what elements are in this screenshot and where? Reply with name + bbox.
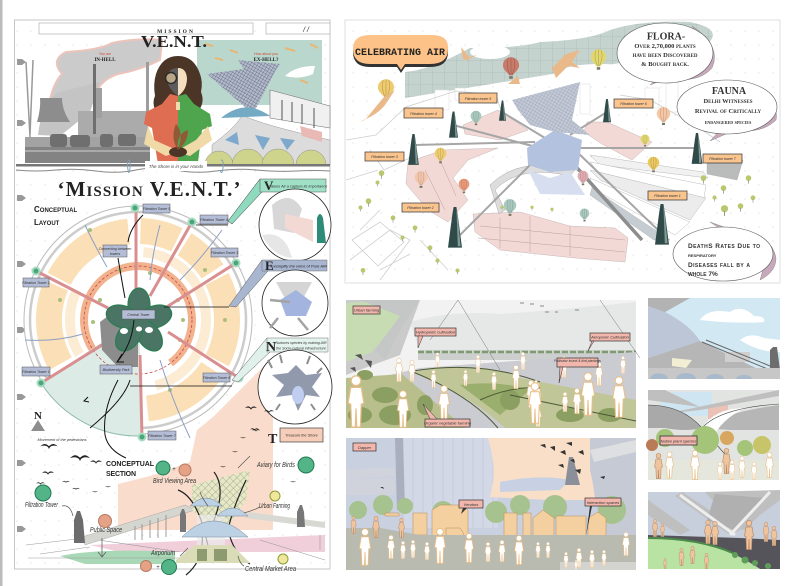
- hero: ex-hell green scene: [197, 40, 330, 165]
- bird flock: [36, 406, 296, 493]
- bubble: death rates: whole 7%: [688, 271, 718, 278]
- section labels: Aviary for Birds: [256, 462, 295, 469]
- tower shaft: [395, 438, 405, 510]
- labels: Interaction spaces: [587, 500, 619, 505]
- bubble: death rates: respiratory: [688, 253, 717, 259]
- section labels: [25, 462, 296, 573]
- diagonal decks: [415, 112, 697, 235]
- bubble: fauna: endangered species: [705, 120, 752, 126]
- labels: Dapper: [358, 445, 372, 450]
- tower labels: Filtration tower 1: [654, 194, 681, 198]
- deck and skyline: [648, 341, 760, 370]
- bubble: celebrating air: CELEBRATING AIR: [355, 47, 446, 59]
- tower labels on plan: Connecting between: [99, 247, 131, 251]
- hero: in-hell polluted scene: [25, 39, 162, 165]
- plaza lines: [425, 160, 625, 256]
- tower labels on plan: [22, 204, 238, 440]
- market area: [176, 545, 250, 563]
- callout: N: N: [266, 340, 276, 355]
- dome: [648, 298, 700, 358]
- mission small title: MISSION: [157, 29, 195, 35]
- hedge: [732, 552, 771, 569]
- hedge band: [418, 350, 636, 360]
- green ground patch: [60, 551, 175, 564]
- peach building rings: [14, 196, 262, 444]
- pink plazas: [406, 110, 652, 262]
- glass facade: [403, 438, 498, 528]
- labels: [353, 443, 621, 536]
- callout: V: Values Air a capture its importance: [269, 184, 327, 188]
- caption: in-hell: You are: [99, 52, 111, 56]
- tower labels: Filtration tower 7: [709, 157, 737, 161]
- tower labels on plan: towers: [110, 252, 120, 256]
- left panels: [346, 467, 395, 495]
- white fan canopies: [590, 155, 743, 240]
- ground lines: [26, 535, 325, 560]
- caption: movement of pedestrians: Movement of the pedestrians: [38, 438, 87, 442]
- labels: [353, 306, 630, 427]
- tower labels on plan: Filtration Tower 7: [148, 434, 177, 438]
- section labels: Urban Farming: [259, 503, 290, 510]
- callout: E: E: [265, 258, 274, 273]
- caption: ex-hell: How about you: [254, 52, 278, 56]
- north arrow: [31, 410, 45, 431]
- labels: Pollinator insect & bird plantings: [554, 359, 601, 363]
- header date marks: / /: [302, 27, 310, 34]
- tower labels on plan: Filtration Tower 6: [203, 376, 230, 380]
- tower labels: Filtration tower 2: [407, 206, 434, 210]
- circular promenade: [64, 246, 212, 394]
- birds over market: [380, 442, 605, 489]
- central star tower: [103, 288, 175, 356]
- kiosks: [385, 505, 606, 552]
- promenade deck: [82, 505, 195, 545]
- labels: Organic vegetable farming: [424, 420, 472, 426]
- illustration: girl with gas mask holding plant: [144, 56, 212, 164]
- badges: filtration and people icons: +: [156, 565, 160, 571]
- conceptual section drawing: [26, 456, 325, 575]
- left filtration tower: [74, 511, 85, 543]
- trees: [646, 426, 771, 456]
- sky peach: [488, 438, 600, 500]
- ground pink: [90, 535, 325, 552]
- tower at right: [770, 347, 780, 370]
- panel: urban farming perspective: [346, 300, 640, 428]
- section labels: Airporium: [150, 550, 175, 557]
- caption: in-hell: IN-HELL: [94, 58, 116, 63]
- conceptual section heading: CONCEPTUAL: [106, 461, 155, 468]
- tower labels on plan: Filtration Tower 2: [22, 281, 50, 285]
- distant tower: [565, 457, 580, 485]
- tower labels: Filtration tower 3: [371, 155, 398, 159]
- tower labels: [365, 93, 742, 212]
- detail circle: filtration tower: [259, 189, 331, 261]
- panel: green lawn walkway: [648, 490, 780, 569]
- central tower shadow: [100, 307, 138, 367]
- torn paper strip with caption: [16, 160, 330, 173]
- badges: filtration and people icons: [35, 457, 314, 574]
- section labels: Filtration Tower: [25, 502, 58, 509]
- bubble: fauna: Revival of Critically: [695, 108, 762, 115]
- left gray structure with green roof: [346, 300, 420, 375]
- callout: T: [268, 428, 323, 447]
- label: Native plant species: [661, 438, 696, 444]
- callout: V: [196, 178, 331, 261]
- bubble: death rates: [673, 222, 776, 281]
- callout: T: T: [268, 432, 278, 447]
- dark path: [648, 535, 780, 569]
- conceptual section heading: [106, 461, 155, 478]
- stepped central ring: [490, 165, 575, 214]
- workers: [348, 352, 626, 427]
- tower labels on plan: Central Tower: [127, 313, 150, 317]
- bubble: fauna: Delhi Witnesses: [703, 98, 753, 105]
- arrows: [62, 456, 260, 566]
- spokes: [36, 208, 239, 437]
- detail circle: lattice core: [262, 270, 328, 336]
- bubble: death rates: DeathS Rates Due to: [688, 243, 760, 250]
- tower labels: Filtration tower 6: [620, 102, 647, 106]
- bubble: death rates: Diseases fall by a: [688, 262, 750, 269]
- tower labels: Filtration tower 4: [410, 112, 437, 116]
- blue circulation arcs: [25, 225, 222, 438]
- aviary lattice: [192, 470, 250, 535]
- hot air balloons: [378, 49, 670, 221]
- callout: N: the Socio-cultural infrastructure: [276, 346, 326, 350]
- bubble: flora: [617, 23, 714, 85]
- heading: mission vent: ‘MISSION V.E.N.T.’: [58, 177, 240, 201]
- conceptual layout plan: [14, 196, 262, 458]
- callout: N: Nurtures species by making AIR: [275, 341, 327, 345]
- bubble: flora: & Bought back.: [641, 61, 689, 68]
- ground: [346, 528, 636, 570]
- conceptual section heading: SECTION: [106, 471, 136, 478]
- city outline: [346, 91, 740, 280]
- mint sector: [41, 320, 142, 436]
- section labels: Bird Viewing Area: [153, 478, 196, 485]
- panel: central market perspective: [346, 438, 636, 570]
- binder hole arrows: [17, 59, 26, 532]
- detail circle: star plan: [258, 350, 332, 424]
- structure lines: [430, 300, 640, 370]
- caption: in-hell: [94, 52, 116, 63]
- subheading: conceptual layout: [34, 205, 77, 227]
- callout: T: Treasure the Shore: [285, 434, 318, 438]
- crowd: [351, 516, 630, 570]
- labels: Hydroponic cultivation: [416, 330, 456, 334]
- bubble: fauna: [677, 80, 777, 141]
- walkway: [346, 352, 636, 428]
- roof arches: [648, 390, 779, 414]
- callout: V: V: [264, 178, 274, 193]
- tower labels on plan: Filtration Tower 5: [143, 207, 170, 211]
- bubble: flora: have been Discovered: [632, 52, 698, 59]
- tower labels on plan: Biodiversity Park: [103, 368, 130, 372]
- caption: ex-hell: EX-HELL?: [253, 58, 279, 63]
- bubble: fauna: FAUNA: [712, 86, 747, 97]
- callout: E: Exemplify the voice of Pure AIR: [271, 264, 327, 268]
- bubble: celebrating air: [353, 35, 448, 73]
- tower labels on plan: Filtration Tower 4: [200, 218, 228, 222]
- lattice tower: [512, 82, 590, 135]
- tower labels on plan: Filtration Tower 1: [22, 370, 50, 374]
- callout: E: [164, 258, 328, 336]
- torn paper strip with caption: The Shore is in your Hands: [149, 164, 204, 169]
- panel: celebrating air aerial view: [345, 20, 780, 283]
- birds: [349, 47, 580, 125]
- farm beds: [346, 374, 465, 428]
- north arrow: N: [34, 410, 42, 422]
- labels: Aeroponic Cultivation: [590, 334, 630, 340]
- lawn: [648, 538, 760, 569]
- peach backdrop behind section: [118, 357, 273, 530]
- tower labels on plan: Filtration Tower 3: [211, 251, 238, 255]
- flow arrows: [84, 215, 143, 458]
- birds over farm: [350, 303, 579, 372]
- caption: ex-hell: [253, 52, 279, 63]
- filtration towers: [408, 99, 702, 248]
- section labels: Central Market Area: [245, 566, 296, 573]
- trees: [358, 170, 755, 275]
- subheading: conceptual layout: Conceptual: [34, 205, 77, 214]
- page edge: [0, 0, 2, 586]
- mid filtration tower: [180, 509, 186, 532]
- callout: N: [130, 338, 332, 424]
- panel: native plant species: [646, 390, 779, 480]
- tower labels: Filtration tower 5: [465, 97, 491, 101]
- bubble: flora: FLORA-: [647, 32, 685, 42]
- filtration tower nodes: [32, 204, 242, 440]
- header boxes: [39, 23, 330, 34]
- people: [652, 519, 777, 569]
- arches: [648, 368, 780, 379]
- badges: filtration and people icons: +: [172, 467, 176, 473]
- tree band: [349, 495, 626, 524]
- main vent title: V.E.N.T.: [141, 32, 207, 51]
- diagonal beams: [648, 490, 780, 535]
- labels: Vendors: [464, 502, 478, 507]
- labels: Urban farming: [354, 308, 380, 312]
- right building: [590, 438, 636, 540]
- panel: mission vent concept sheet: [14, 20, 332, 575]
- section labels: Public Space: [90, 527, 122, 534]
- blue domes: [182, 498, 248, 537]
- subheading: conceptual layout: Layout: [34, 218, 60, 227]
- sky: [405, 22, 713, 98]
- panel: plaza with sky view: [648, 298, 780, 379]
- bubble: flora: Over 2,70,000 plants: [634, 43, 696, 50]
- crowd: [655, 448, 773, 480]
- ground: [648, 460, 779, 480]
- blue canopy below lattice: [527, 130, 582, 172]
- right filtration tower: [297, 505, 305, 527]
